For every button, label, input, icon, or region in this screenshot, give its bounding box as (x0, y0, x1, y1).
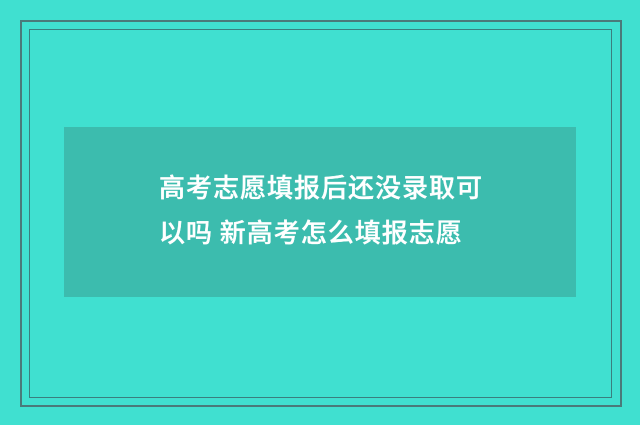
title (159, 173, 483, 248)
title: 高考志愿填报后还没录取可 (159, 173, 483, 203)
title: 以吗 新高考怎么填报志愿 (159, 218, 463, 248)
panel: title band (64, 127, 576, 297)
inner border frame (29, 29, 612, 398)
